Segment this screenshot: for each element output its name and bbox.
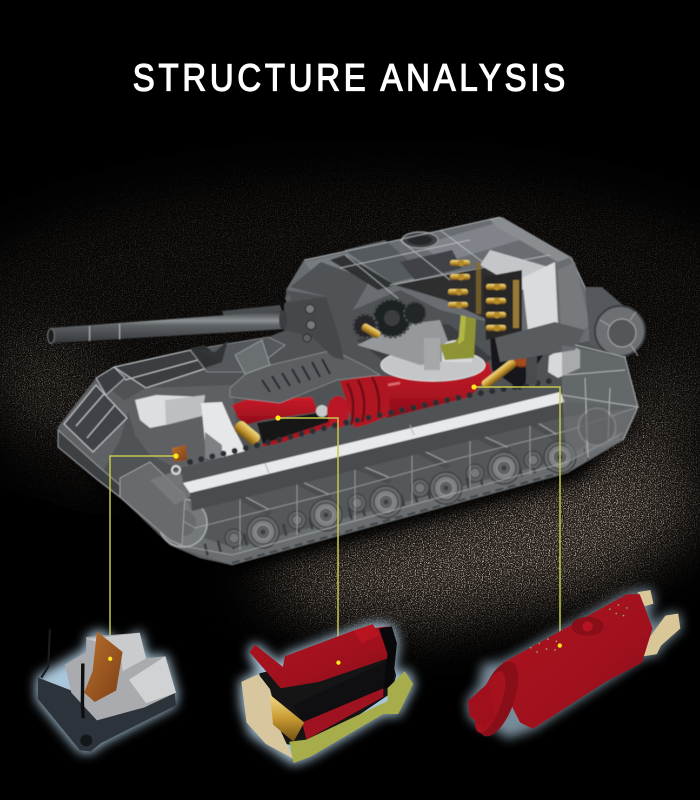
hull side glass lattice bbox=[120, 405, 638, 565]
rear drum bbox=[585, 287, 645, 360]
callout line: crew seat bbox=[110, 453, 179, 658]
tank ground shadow bbox=[60, 420, 640, 572]
callout line: engine bbox=[275, 415, 338, 663]
engine deck grille bbox=[192, 340, 380, 403]
part: crew seat module bbox=[38, 629, 176, 752]
left interior: white blocks bbox=[125, 385, 245, 474]
front deck panels bbox=[114, 337, 285, 388]
lower hull glass bbox=[120, 402, 638, 565]
red engine bbox=[327, 358, 492, 430]
title: STRUCTURE ANALYSIS bbox=[133, 57, 565, 99]
suspension arms bbox=[237, 418, 556, 512]
tank model bbox=[48, 217, 645, 572]
ammunition rack with brass pins bbox=[448, 260, 522, 340]
glow bbox=[468, 590, 680, 737]
hull silhouette bbox=[58, 217, 645, 565]
glow bbox=[241, 624, 413, 763]
ground texture bbox=[0, 155, 700, 666]
gun mantlet bbox=[284, 295, 344, 360]
road wheels bbox=[159, 408, 616, 548]
left interior: red engine part bbox=[232, 397, 335, 449]
part: transmission module bbox=[468, 590, 680, 741]
turret body bbox=[286, 217, 596, 345]
orange gear and brass tube bbox=[480, 320, 580, 390]
engine backing block bbox=[259, 641, 396, 748]
rear hull shell bbox=[562, 345, 638, 462]
white turret block bbox=[495, 262, 590, 362]
part: engine module bbox=[241, 624, 413, 763]
nose armor bbox=[58, 367, 197, 545]
upper hull band with studs bbox=[181, 380, 565, 511]
gears bbox=[353, 299, 426, 339]
track bbox=[170, 430, 623, 565]
gun barrel bbox=[48, 305, 287, 344]
glow bbox=[38, 631, 176, 752]
turret ring and olive arm bbox=[357, 313, 492, 382]
callout line: transmission bbox=[471, 384, 560, 645]
